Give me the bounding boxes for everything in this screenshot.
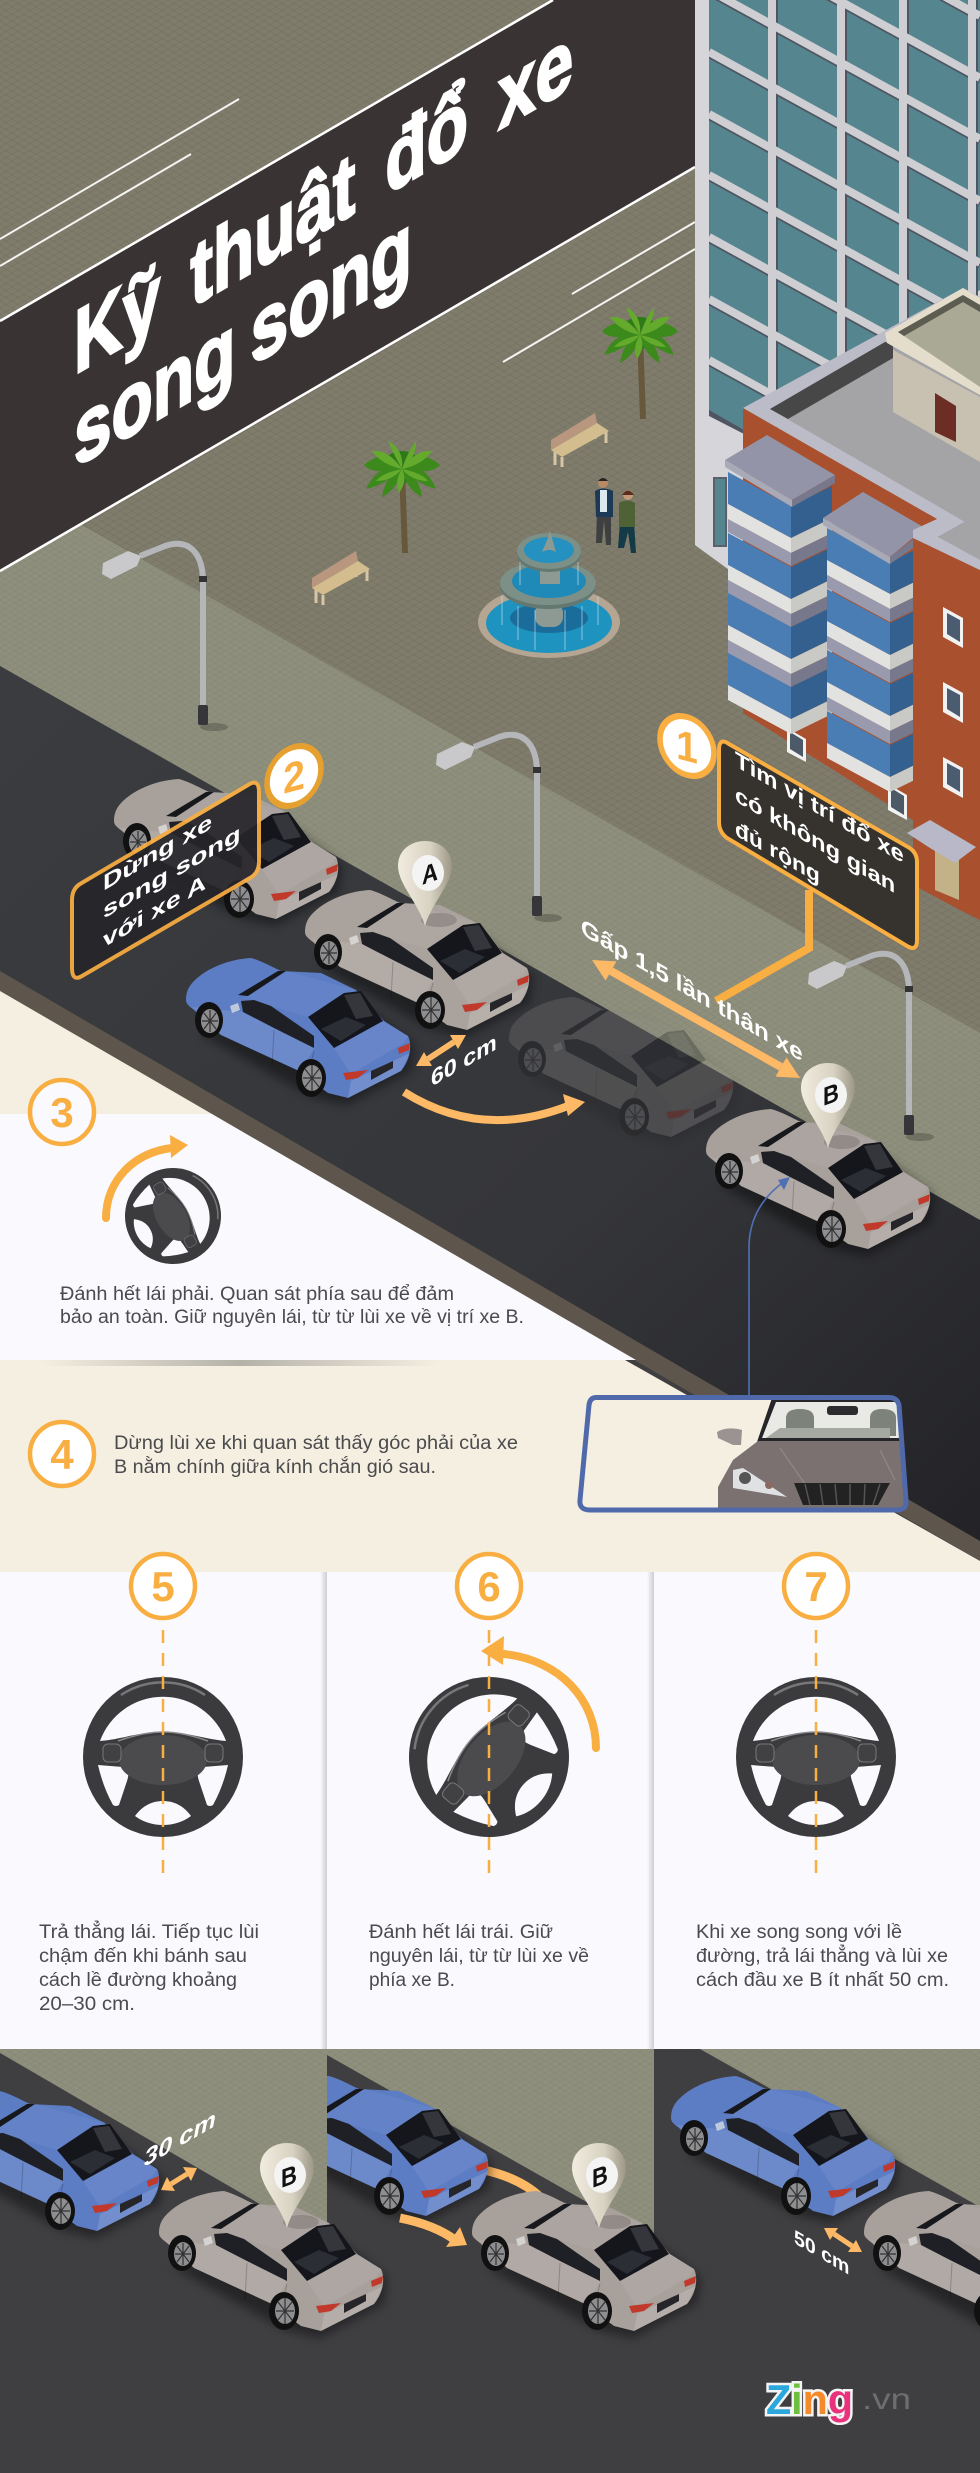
building: roof bbox=[743, 288, 980, 570]
curb bbox=[0, 971, 980, 1561]
car behind, step 2 bbox=[114, 779, 342, 926]
scene 6: upper arc arrow bbox=[484, 2170, 540, 2197]
step number 6: 6 bbox=[477, 1563, 501, 1610]
step number 5 bbox=[131, 1554, 195, 1618]
text: step 5 bbox=[39, 1921, 259, 2015]
steering wheel, step 3 bbox=[107, 1150, 239, 1282]
panel: step 7 bbox=[654, 1572, 980, 2049]
double arrow: 60 cm bbox=[416, 1035, 466, 1066]
panel: step 5 bbox=[0, 1572, 327, 2049]
step number 1 bbox=[660, 710, 714, 782]
scene 6: pin B bbox=[572, 2143, 631, 2229]
bench bbox=[312, 551, 370, 605]
logo: Zing.vn: .vn bbox=[862, 2383, 911, 2416]
text: step 6 bbox=[369, 1922, 589, 1991]
road bbox=[0, 666, 980, 1545]
arrow: turn right bbox=[106, 1135, 188, 1218]
pin B bbox=[801, 1063, 860, 1149]
double arrow: 30 cm bbox=[161, 2167, 197, 2191]
text: step 4: Dừng lùi xe khi quan sát thấy góc phải của xe bbox=[114, 1433, 518, 1454]
panel shadow bbox=[40, 1360, 440, 1366]
street lamp bbox=[102, 544, 228, 731]
scene 5: blue car bbox=[0, 2091, 163, 2238]
callout 2: song song bbox=[103, 819, 241, 924]
double arrow: 1.5 car lengths bbox=[592, 960, 800, 1078]
pin A bbox=[398, 841, 457, 927]
step number 2: 2 bbox=[283, 750, 305, 803]
label: 1.5 car lengths: Gấp 1,5 lần thân xe bbox=[581, 913, 803, 1067]
scene 5: car B bbox=[159, 2191, 387, 2338]
brick wing bbox=[913, 519, 980, 920]
penthouse bbox=[885, 288, 980, 462]
people bbox=[595, 478, 636, 553]
step number 6 bbox=[457, 1554, 521, 1618]
text: step 6: phía xe B. bbox=[369, 1970, 455, 1991]
text: step 5: Trả thẳng lái. Tiếp tục lùi bbox=[39, 1921, 259, 1943]
car A bbox=[305, 890, 533, 1037]
fountain bbox=[478, 530, 620, 658]
light sidewalk strip bbox=[0, 524, 980, 1220]
cream background bbox=[0, 991, 980, 1572]
balcony column 2 bbox=[823, 492, 931, 792]
title band road bbox=[0, 0, 695, 571]
orange connector from callout 1 bbox=[716, 890, 809, 1001]
step number 7 bbox=[784, 1554, 848, 1618]
double arrow: 50 cm bbox=[824, 2228, 862, 2252]
scene 6: lower arc arrow bbox=[400, 2218, 467, 2247]
window under balcony bbox=[787, 728, 907, 820]
text: step 4: B nằm chính giữa kính chắn gió sau. bbox=[114, 1456, 436, 1478]
title: Kỹ thuật đổ xe bbox=[74, 6, 573, 394]
background: paved plaza bbox=[0, 0, 980, 1300]
text: step 7: cách đầu xe B ít nhất 50 cm. bbox=[696, 1970, 949, 1991]
blue car bbox=[186, 958, 414, 1105]
balcony column 1 bbox=[725, 435, 835, 734]
ghost car bbox=[509, 997, 737, 1144]
text: step 3: Đánh hết lái phải. Quan sát phía sau để đảm bbox=[60, 1284, 454, 1305]
text: step 6: Đánh hết lái trái. Giữ bbox=[369, 1922, 553, 1943]
text: step 3: bảo an toàn. Giữ nguyên lái, từ từ lùi xe về vị trí xe B. bbox=[60, 1307, 524, 1328]
entrance door and awning bbox=[907, 820, 976, 900]
scene 5: pin B bbox=[260, 2143, 319, 2229]
bench bbox=[551, 413, 609, 467]
windows bbox=[943, 607, 963, 798]
label: 30 cm: 30 cm bbox=[144, 2104, 216, 2172]
step number 4 bbox=[30, 1422, 94, 1486]
text: step 5: 20–30 cm. bbox=[39, 1994, 135, 2015]
logo: Zing.vn: Zing bbox=[766, 2376, 853, 2423]
text: step 7: đường, trả lái thẳng và lùi xe bbox=[696, 1945, 948, 1967]
blue sight line to car B bbox=[749, 1177, 790, 1396]
callout 1: đủ rộng bbox=[735, 815, 820, 889]
text: step 6: nguyên lái, từ từ lùi xe về bbox=[369, 1946, 589, 1967]
step number 3 bbox=[30, 1080, 94, 1144]
rear-view mirror bbox=[580, 1398, 912, 1511]
scene 6: car B bbox=[472, 2191, 700, 2338]
text: step 5: chậm đến khi bánh sau bbox=[39, 1946, 247, 1967]
scene 7: blue car bbox=[671, 2076, 899, 2223]
pin B: B bbox=[823, 1078, 839, 1112]
panel: step 3 white area bbox=[0, 1114, 636, 1360]
scene 6: pin B: B bbox=[592, 2160, 608, 2194]
curved arrow to B bbox=[404, 1092, 585, 1120]
dashed guide lines bbox=[163, 1630, 816, 1875]
text: step 5: cách lề đường khoảng bbox=[39, 1970, 237, 1991]
step number 7: 7 bbox=[804, 1563, 828, 1610]
callout 2 bbox=[72, 783, 259, 978]
logo: Zing.vn bbox=[766, 2376, 911, 2423]
car B bbox=[706, 1109, 934, 1256]
bottom road bbox=[0, 2049, 980, 2473]
logo: Zing.vn: Zing bbox=[766, 2376, 853, 2423]
label: 50 cm: 50 cm bbox=[794, 2226, 849, 2280]
callout 2: với xe A bbox=[103, 868, 206, 953]
sidewalk: scene 7 bbox=[700, 2049, 980, 2207]
brick wall bbox=[743, 408, 937, 820]
step number 3: 3 bbox=[50, 1089, 74, 1136]
callout 1: Tìm vị trí đổ xe bbox=[735, 746, 904, 869]
step number 5: 5 bbox=[151, 1563, 175, 1610]
panel: step 6 bbox=[327, 1572, 654, 2049]
text: step 4 bbox=[114, 1433, 518, 1478]
scene 5: pin B: B bbox=[281, 2160, 297, 2194]
palm tree bbox=[364, 441, 440, 553]
steering wheel, step 6 bbox=[376, 1644, 602, 1870]
arrow: turn left bbox=[481, 1636, 596, 1748]
callout 2: Dừng xe bbox=[103, 808, 212, 896]
callout 1 bbox=[719, 742, 917, 948]
step number 2 bbox=[267, 740, 321, 812]
text: step 7: Khi xe song song với lề bbox=[696, 1922, 902, 1943]
sidewalk: scene 5 bbox=[0, 2049, 327, 2243]
pin A: A bbox=[422, 857, 438, 891]
palm tree bbox=[602, 307, 678, 419]
sidewalk: scene 6 bbox=[327, 2049, 654, 2240]
callout 1: có không gian bbox=[735, 781, 895, 899]
steering wheel, step 5 bbox=[83, 1677, 243, 1837]
label: 60 cm: 60 cm bbox=[431, 1028, 497, 1092]
steering wheel, step 7 bbox=[736, 1677, 896, 1837]
scene 7: car B bbox=[864, 2191, 980, 2338]
street lamp bbox=[808, 954, 934, 1141]
title: song song bbox=[74, 192, 412, 487]
step number 1: 1 bbox=[676, 720, 698, 773]
step number 4: 4 bbox=[50, 1431, 74, 1478]
text: step 7 bbox=[696, 1922, 949, 1991]
glass tower bbox=[695, 0, 980, 569]
text: step 3 bbox=[60, 1284, 524, 1328]
street lamp bbox=[436, 735, 562, 922]
scene 6: blue car bbox=[327, 2076, 498, 2222]
